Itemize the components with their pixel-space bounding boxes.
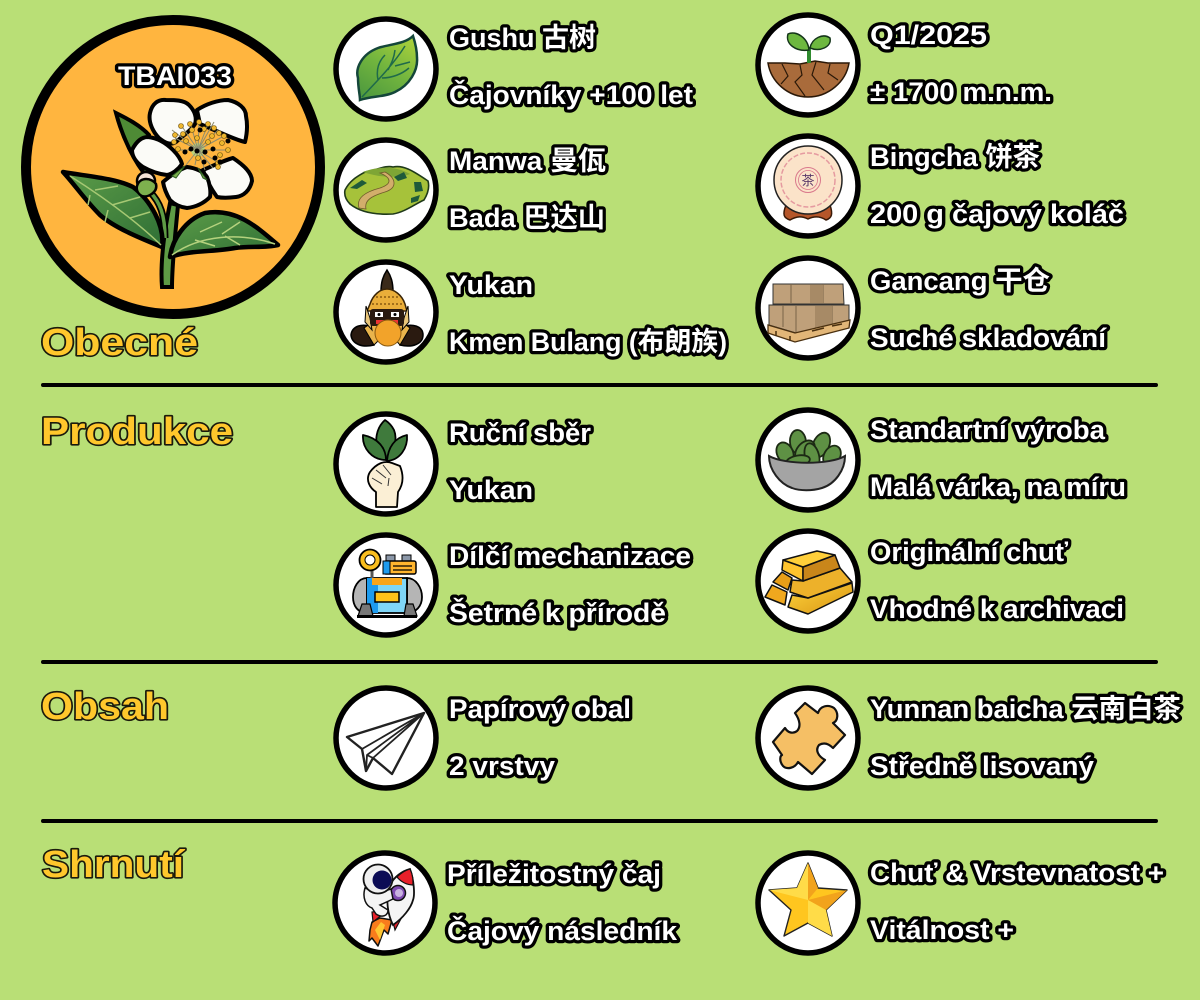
label: batch: Malá várka, na míru — [870, 472, 1126, 502]
icon: gold bars — [758, 531, 858, 631]
item: harvest date — [758, 15, 1052, 115]
heading: Produkce: Produkce — [41, 411, 233, 453]
heading: Obecné: Obecné — [41, 322, 198, 364]
icon: guardian figure with orb — [336, 262, 436, 362]
label: storage: Suché skladování — [870, 323, 1108, 353]
icon: sprout in soil — [758, 15, 858, 115]
item: taste summary — [758, 853, 1164, 953]
item: Gancang — [758, 258, 1108, 358]
item: paper wrapper — [336, 688, 631, 788]
label: compression: Středně lisovaný — [870, 751, 1094, 781]
label: Bada: Bada 巴达山 — [449, 203, 605, 233]
label: weight: 200 g čajový koláč — [870, 199, 1124, 229]
item: Yukan — [336, 262, 727, 362]
label: eco: Šetrné k přírodě — [449, 597, 666, 628]
product code: TBAI033 — [118, 61, 232, 91]
item: partial mechanization — [336, 535, 691, 635]
label: Bingcha: Bingcha 饼茶 — [870, 142, 1040, 172]
item: Bingcha — [758, 136, 1124, 236]
item: standard production — [758, 410, 1126, 510]
label: occasion: Příležitostný čaj — [447, 859, 661, 889]
label: taste: Chuť & Vrstevnatost + — [870, 858, 1164, 888]
label: production: Standartní výroba — [870, 415, 1106, 445]
icon: paper plane — [336, 688, 436, 788]
label: date: Q1/2025 — [870, 20, 987, 50]
label: age: Čajovníky +100 let — [449, 79, 693, 110]
label: archiving: Vhodné k archivaci — [870, 594, 1124, 624]
icon: hand holding leaves — [336, 414, 436, 514]
icon: leaf — [336, 19, 436, 119]
label: Gancang: Gancang 干仓 — [870, 266, 1050, 296]
item: Manwa — [336, 140, 606, 240]
label: Yunnan baicha: Yunnan baicha 云南白茶 — [870, 694, 1181, 724]
label: Gushu: Gushu 古树 — [449, 23, 596, 53]
item: hand picking — [336, 414, 591, 514]
label: vitality: Vitálnost + — [870, 915, 1014, 945]
icon: machine — [336, 535, 436, 635]
icon: puzzle piece — [758, 688, 858, 788]
label: successor: Čajový následník — [447, 915, 678, 946]
item: Yunnan baicha — [758, 688, 1181, 788]
label: taste: Originální chuť — [870, 537, 1068, 567]
label: hand picking: Ruční sběr — [449, 418, 591, 448]
icon: tea cake on stand — [758, 136, 858, 236]
label: ethnic group: Kmen Bulang (布朗族) — [449, 327, 727, 357]
badge: TBAI033 tea flower — [26, 20, 320, 314]
label: layers: 2 vrstvy — [449, 751, 555, 781]
heading: Shrnutí: Shrnutí — [42, 844, 186, 886]
divider — [43, 385, 1156, 821]
icon: astronaut on rocket — [335, 853, 435, 953]
label: Yukan: Yukan — [449, 270, 533, 300]
icon text: 茶 — [801, 170, 815, 189]
label: Manwa: Manwa 曼佤 — [449, 146, 606, 176]
label: mechanization: Dílčí mechanizace — [449, 541, 691, 571]
label: altitude: ± 1700 m.n.m. — [870, 77, 1052, 107]
heading: Obsah: Obsah — [41, 686, 169, 728]
icon: boxes on pallet — [758, 258, 858, 358]
label: Yukan: Yukan — [449, 475, 533, 505]
item: occasional tea — [335, 853, 678, 953]
label: wrapper: Papírový obal — [449, 694, 631, 724]
item: Gushu — [336, 19, 693, 119]
item: original taste — [758, 531, 1124, 631]
illustration: tea flower — [63, 100, 278, 287]
icon: mountain — [336, 140, 436, 240]
icon: bowl of leaves — [758, 410, 858, 510]
icon: star — [758, 853, 858, 953]
